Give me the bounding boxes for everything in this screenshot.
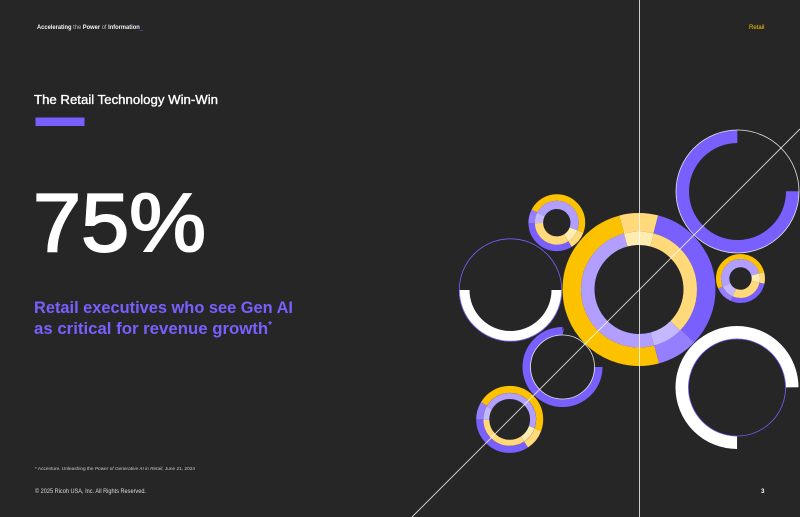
vertical rule	[638, 0, 640, 517]
ring: lower purple	[526, 331, 598, 403]
header tagline: Accelerating the Power of Information_	[37, 25, 144, 31]
diagonal rule	[412, 129, 800, 517]
big statistic: 75%	[33, 176, 206, 269]
title accent bar	[36, 118, 84, 126]
ring: small bottom-left segmented donut	[480, 389, 540, 449]
ring: left white half	[459, 239, 562, 341]
page number: 3	[761, 488, 765, 495]
ring: small top segmented donut	[532, 197, 582, 248]
statistic description: as critical for revenue growth	[34, 319, 271, 338]
ring: top right purple	[676, 130, 799, 253]
statistic description: *	[268, 320, 272, 331]
title: The Retail Technology Win-Win	[34, 92, 218, 107]
statistic description: Retail executives who see Gen AI	[34, 298, 293, 317]
statistic description	[34, 298, 293, 338]
ring: bottom right white	[682, 332, 792, 442]
ring: central segmented donut	[572, 222, 706, 357]
copyright: © 2025 Ricoh USA, Inc. All Rights Reserved.	[35, 488, 146, 495]
footnote: * Accenture, Unleashing the Power of Generative AI in Retail, June 21, 2024	[35, 466, 195, 471]
section label: Retail	[749, 24, 764, 31]
ring: small right segmented donut	[718, 256, 762, 300]
